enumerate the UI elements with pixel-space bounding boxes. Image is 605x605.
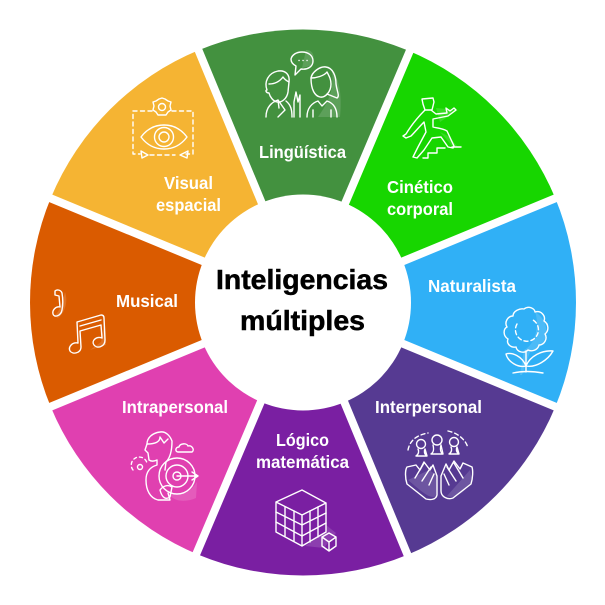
sector: Interpersonal	[303, 302, 555, 555]
icon: person climbing stairs	[403, 98, 461, 158]
title: múltiples	[240, 305, 365, 336]
sector: Intrapersonal	[51, 302, 303, 555]
label: Cinético corporal: corporal	[387, 199, 453, 219]
label: Interpersonal: Interpersonal	[375, 397, 482, 417]
label: Cinético corporal: Cinético	[387, 177, 453, 197]
label: Cinético corporal	[387, 177, 453, 219]
icon: flower	[504, 307, 553, 375]
icon: cube	[276, 490, 336, 551]
label: Lógico matemática	[256, 430, 349, 472]
center circle	[195, 194, 411, 410]
label: Naturalista: Naturalista	[428, 276, 516, 296]
label: Lógico matemática: Lógico	[276, 430, 329, 450]
icon: eye with gear	[133, 98, 193, 158]
label: Intrapersonal: Intrapersonal	[122, 397, 228, 417]
sector: Visual espacial	[51, 50, 303, 302]
title: Inteligencias	[216, 264, 388, 295]
icon: hands holding people	[406, 431, 473, 500]
icon: music notes	[53, 290, 106, 353]
label: Lógico matemática: matemática	[256, 452, 349, 472]
sector: Lógico matemática	[198, 302, 408, 575]
label: Visual espacial: espacial	[156, 195, 221, 215]
sector: Lingüística	[198, 30, 408, 302]
label: Lingüística: Lingüística	[259, 142, 346, 162]
label: Visual espacial	[156, 173, 221, 215]
icon: person with target	[131, 432, 198, 501]
sector: Musical	[30, 198, 303, 407]
icon: two people talking	[266, 50, 341, 117]
label: Visual espacial: Visual	[164, 173, 213, 193]
sector: Cinético corporal	[303, 50, 555, 302]
title	[216, 264, 388, 336]
sector: Naturalista	[303, 198, 576, 407]
label: Musical: Musical	[116, 291, 178, 311]
